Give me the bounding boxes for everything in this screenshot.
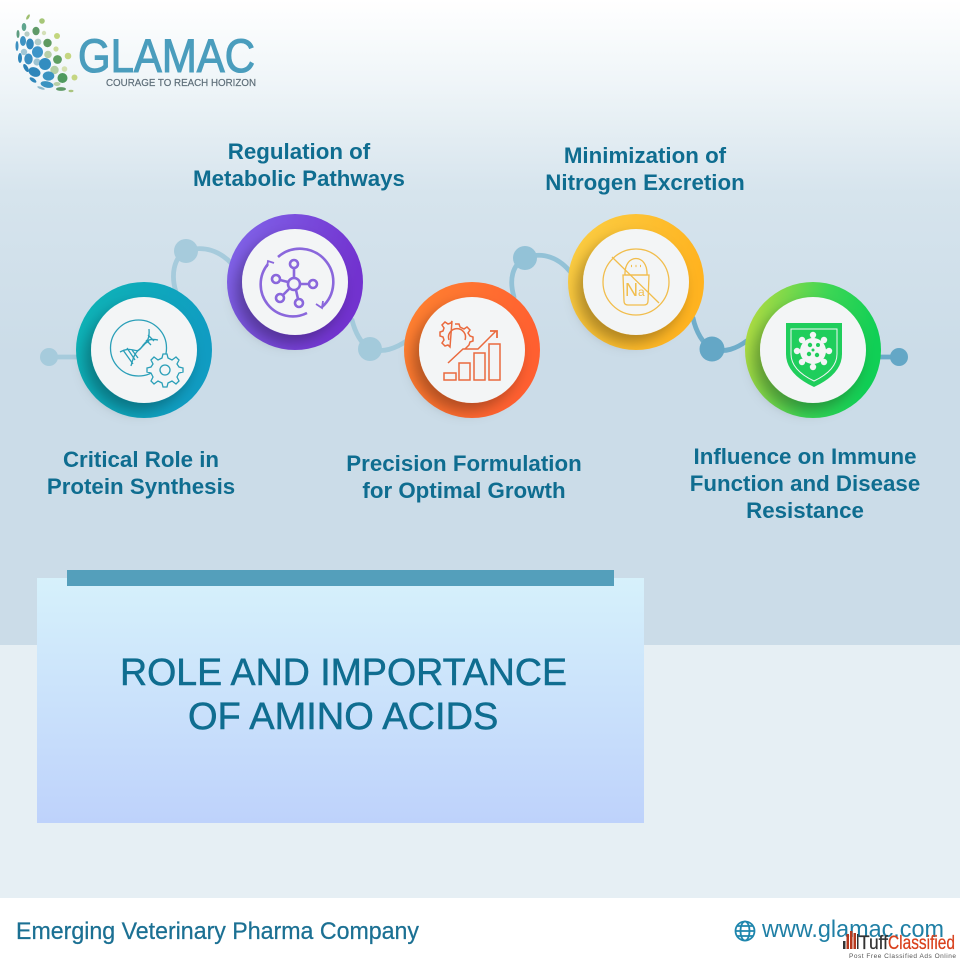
label: precision formulation: for Optimal Growth: [362, 478, 566, 503]
step 3: precision formulation: [404, 282, 540, 418]
icon: gear and growth chart: [440, 321, 500, 380]
ring 1: [76, 282, 212, 418]
icon: metabolic network: [261, 249, 333, 316]
icon: no sodium shaker: [603, 249, 669, 315]
label: precision formulation: Precision Formulation: [346, 451, 582, 476]
icon: logo dot globe: [16, 14, 78, 92]
title card: [37, 570, 644, 823]
icon: DNA and gear: [110, 320, 183, 387]
label: critical role in protein synthesis: Protein Synthesis: [47, 474, 235, 499]
website: www.glamac.com: [761, 916, 944, 943]
icon: shield with virus: [786, 323, 842, 387]
label: minimization of nitrogen excretion: Minimization of: [564, 143, 727, 168]
label: influence on immune function: Resistance: [746, 498, 864, 523]
footer: [16, 916, 956, 960]
logo tagline: COURAGE TO REACH HORIZON: [106, 77, 256, 89]
label: influence on immune function: Influence on Immune: [694, 444, 916, 469]
step 5: immune function: [745, 282, 881, 418]
ring 3: [404, 282, 540, 418]
icon: no sodium shaker: a: [638, 285, 645, 299]
footer tagline: Emerging Veterinary Pharma Company: [16, 918, 419, 945]
logo wordmark: GLAMAC: [78, 29, 255, 82]
step 4: nitrogen excretion: [568, 214, 704, 350]
icon: globe: [736, 922, 754, 940]
ring 4: [568, 214, 704, 350]
connector line with nodes: [40, 239, 908, 366]
main title: OF AMINO ACIDS: [188, 696, 498, 738]
main title: ROLE AND IMPORTANCE: [120, 652, 567, 694]
label: minimization of nitrogen excretion: Nitrogen Excretion: [545, 170, 745, 195]
step 1: protein synthesis: [76, 282, 212, 418]
icon: no sodium shaker: N: [625, 280, 638, 300]
ring 2: [227, 214, 363, 350]
watermark: Post Free Classified Ads Online: [849, 953, 956, 960]
logo: [16, 14, 256, 92]
label: regulation of metabolic pathways: Metabolic Pathways: [193, 166, 405, 191]
title accent bar: [67, 570, 614, 586]
watermark: [843, 931, 956, 960]
label: regulation of metabolic pathways: Regulation of: [228, 139, 371, 164]
step 2: metabolic pathways: [227, 214, 363, 350]
label: critical role in protein synthesis: Critical Role in: [63, 447, 219, 472]
ring 5: [745, 282, 881, 418]
label: influence on immune function: Function and Disease: [690, 471, 920, 496]
watermark: Tuff: [859, 933, 889, 954]
